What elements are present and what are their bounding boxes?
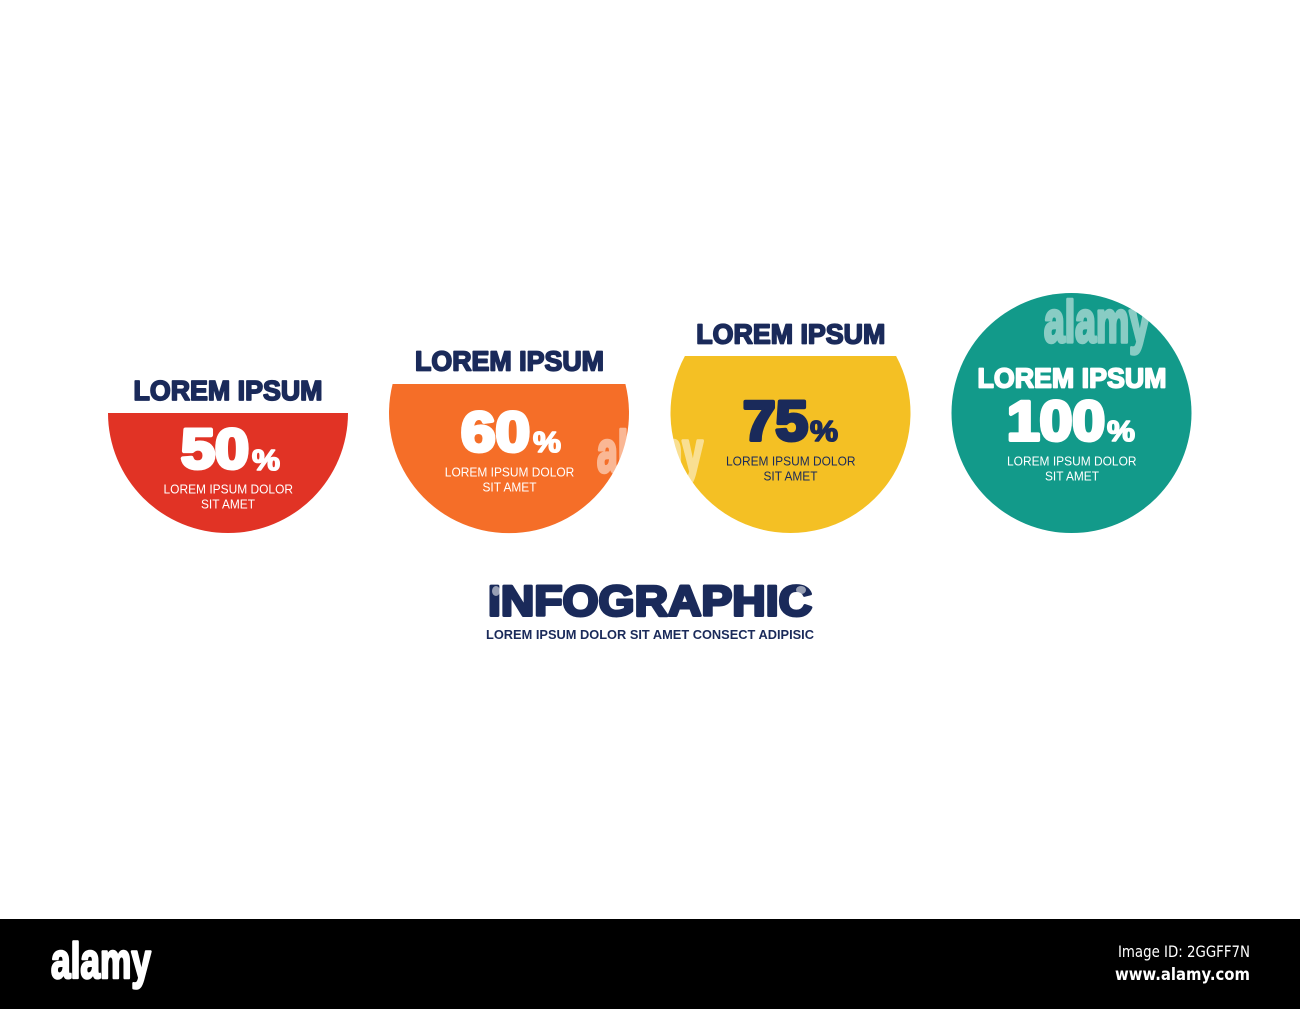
footer logo: alamy	[51, 933, 151, 989]
title: INFOGRAPHIC	[488, 578, 812, 626]
description: 75 percent panel: LOREM IPSUM DOLOR	[726, 454, 856, 468]
description: 50 percent panel	[164, 482, 293, 512]
heading: 50 percent panel: LOREM IPSUM	[134, 375, 322, 406]
heading: 100 percent panel: LOREM IPSUM	[978, 362, 1166, 394]
value: 75%: %	[810, 416, 838, 448]
description: 60 percent panel: SIT AMET	[482, 480, 537, 494]
value: 50%: 50	[181, 417, 249, 480]
watermark fragments over navy text	[492, 325, 806, 596]
value: 60%: %	[533, 427, 561, 459]
red half circle	[108, 413, 348, 533]
title block	[486, 578, 814, 642]
website: www.alamy.com	[1115, 965, 1250, 985]
value: 75%	[743, 389, 838, 452]
teal full circle	[952, 293, 1192, 533]
value: 60%: 60	[461, 400, 530, 463]
description: 60 percent panel: LOREM IPSUM DOLOR	[445, 464, 574, 480]
watermark: teal circle: alamy	[1044, 290, 1150, 355]
footer bar	[0, 919, 1300, 1009]
description: 60 percent panel	[445, 464, 574, 494]
value: 100%: 100	[1007, 389, 1105, 452]
value: 75%: 75	[743, 389, 808, 452]
description: 75 percent panel: SIT AMET	[764, 468, 818, 484]
value: 50%	[181, 417, 280, 480]
panel: 50 percent	[108, 375, 348, 533]
orange circle segment	[389, 384, 629, 533]
value: 50%: %	[252, 445, 280, 477]
description: 100 percent panel: SIT AMET	[1045, 468, 1099, 484]
watermark: centre: alamy	[597, 420, 703, 485]
subtitle: LOREM IPSUM DOLOR SIT AMET CONSECT ADIPISIC	[486, 628, 814, 642]
description: 50 percent panel: SIT AMET	[201, 496, 255, 512]
description: 50 percent panel: LOREM IPSUM DOLOR	[164, 482, 293, 496]
heading: 75 percent panel: LOREM IPSUM	[696, 318, 885, 350]
description: 75 percent panel	[726, 454, 856, 484]
panel: 75 percent	[670, 318, 911, 533]
heading: 60 percent panel: LOREM IPSUM	[415, 346, 604, 376]
panel: 100 percent	[952, 293, 1192, 533]
image id: Image ID: 2GGFF7N	[1118, 942, 1250, 961]
value: 100%: %	[1107, 416, 1135, 448]
panel: 60 percent	[389, 346, 629, 533]
yellow circle segment	[670, 356, 911, 533]
description: 100 percent panel	[1007, 454, 1136, 484]
footer background	[0, 919, 1300, 1009]
description: 100 percent panel: LOREM IPSUM DOLOR	[1007, 454, 1136, 468]
value: 60%	[461, 400, 561, 463]
